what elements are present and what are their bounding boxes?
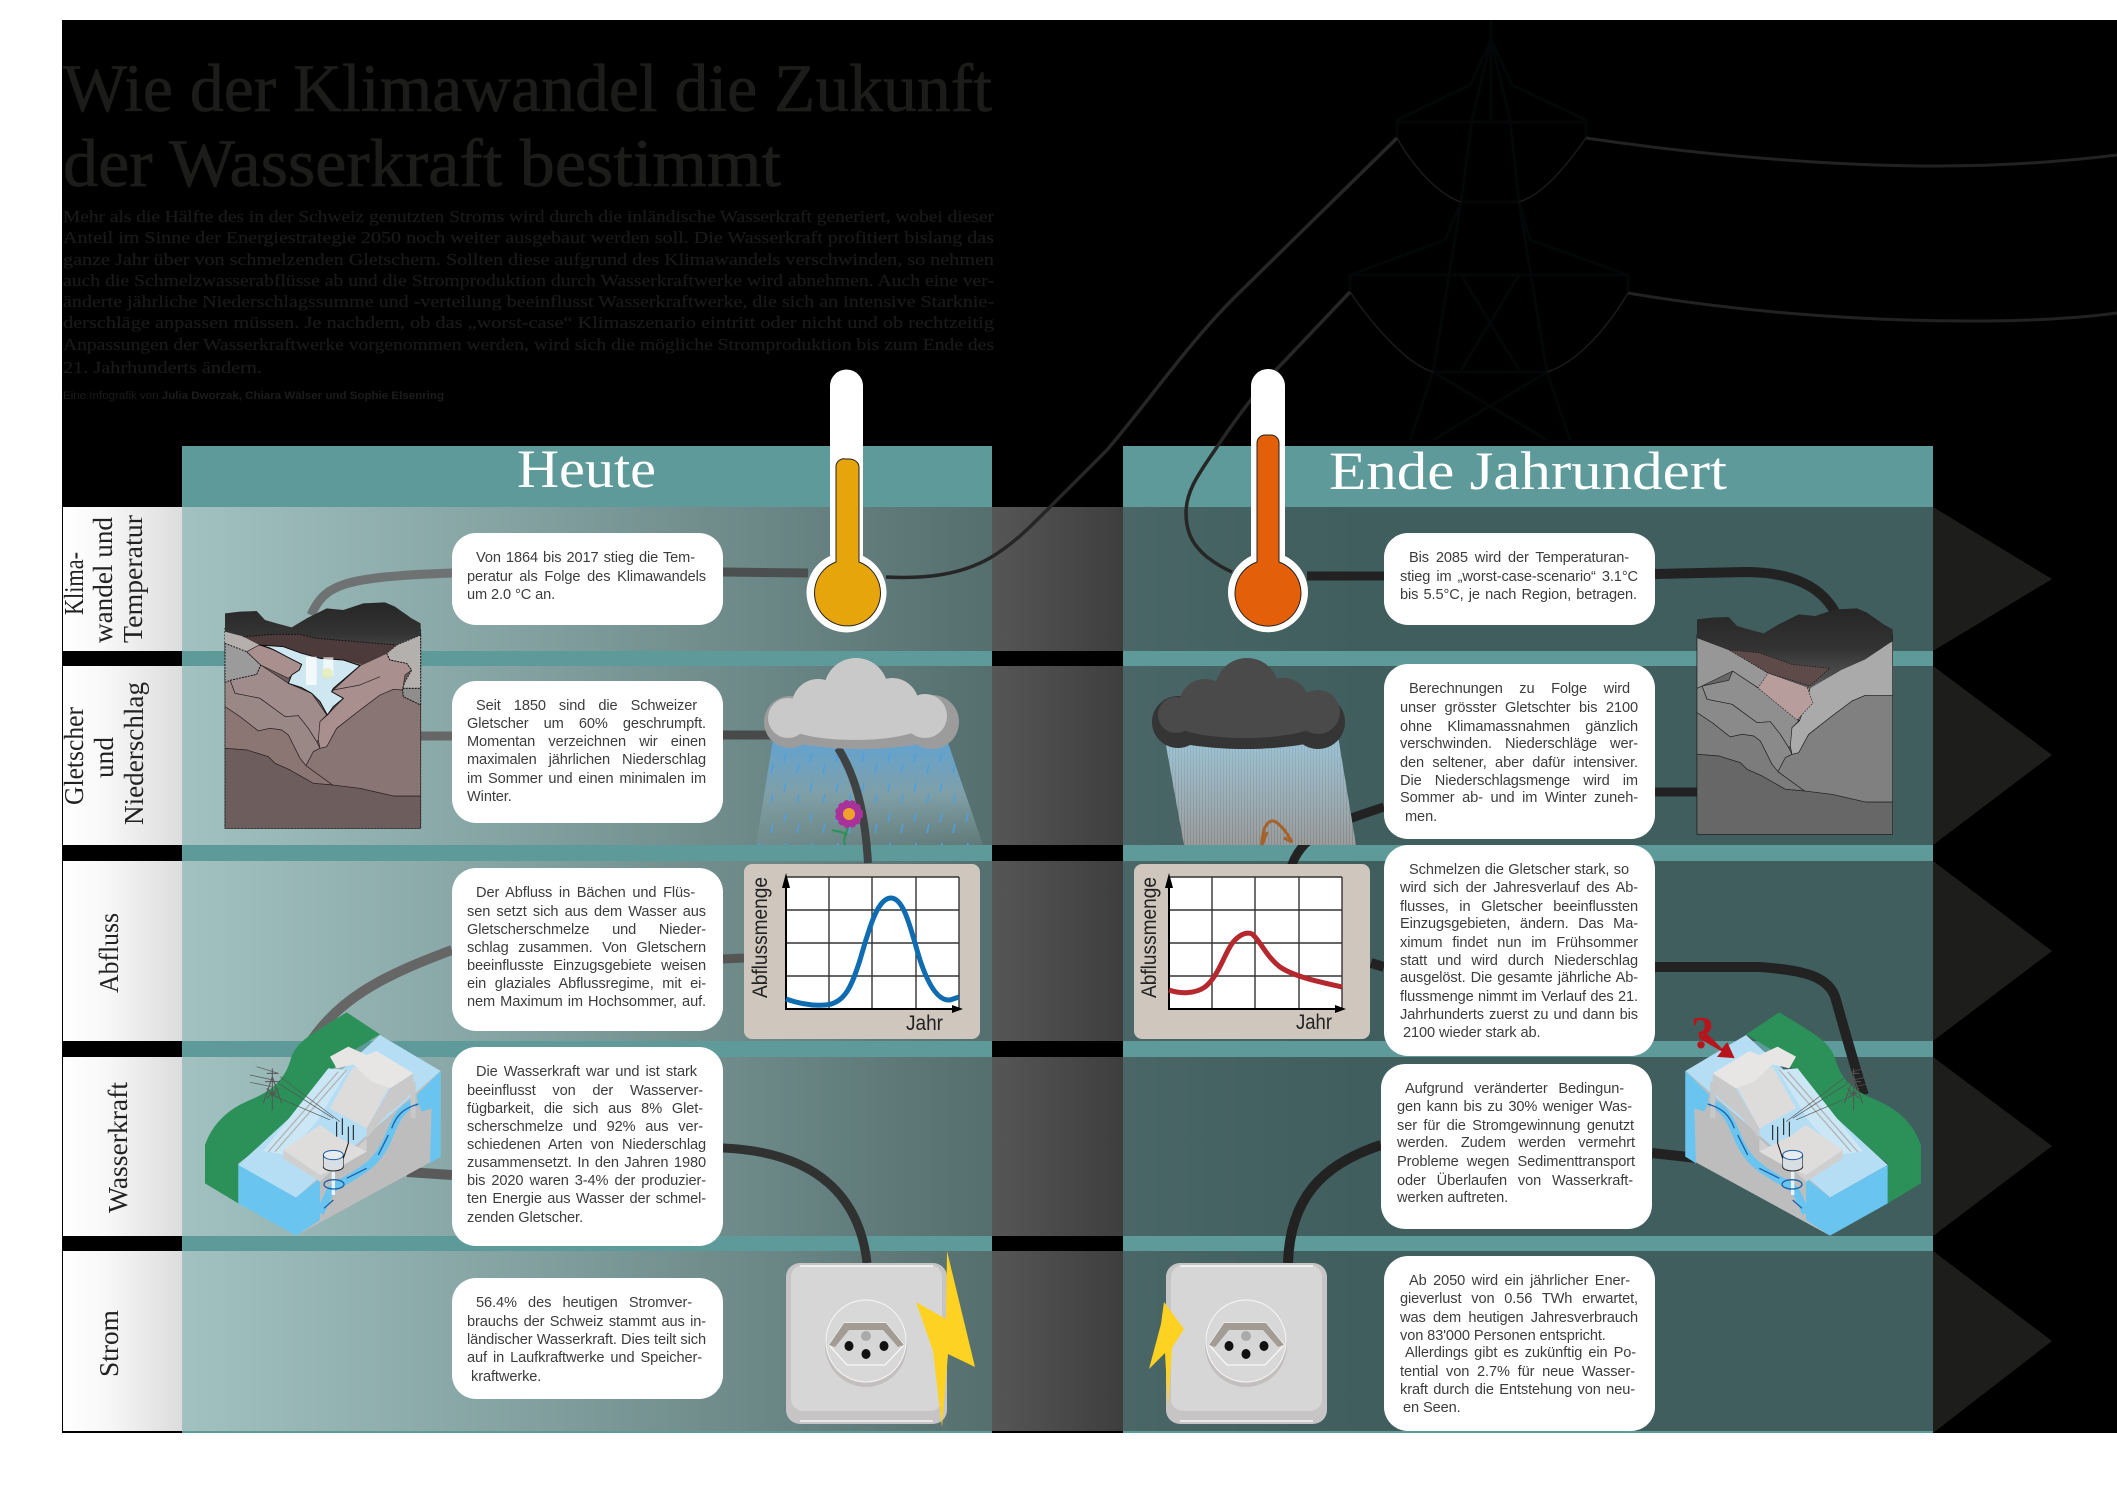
panel: row labels: [59, 507, 182, 1431]
text box: Abfluss future: [1384, 845, 1655, 1056]
text box: Wasserkraft future: werken auftreten.: [1397, 1190, 1508, 1206]
text box: Wasserkraft today: scherschmelze und 92% aus ver-: [467, 1119, 703, 1135]
panel: row labels: Niederschlag: [119, 682, 149, 825]
text box: Abfluss today: sen setzt sich aus dem Wasser aus: [467, 904, 706, 920]
text box: Abfluss future: Jahrhunderts zuerst zu und dann bis: [1400, 1007, 1638, 1023]
text box: Abfluss today: Gletscherschmelze und Nieder-: [467, 922, 706, 938]
panel: row labels: Klima-: [59, 552, 89, 615]
text box: Wasserkraft today: ten Energie aus Wasser der schmel-: [467, 1191, 706, 1207]
icon: lightning bolt today: [916, 1251, 975, 1427]
text box: Strom future: Ab 2050 wird ein jährlicher Ener-: [1409, 1273, 1630, 1289]
icon: hydro power plant future: [1685, 1012, 1921, 1236]
chart: runoff future: [1134, 864, 1370, 1039]
chart: runoff today: [744, 864, 980, 1039]
chart: runoff future: Jahr: [1296, 1011, 1332, 1034]
text box: Strom today: 56.4% des heutigen Stromver-: [476, 1295, 692, 1311]
panel: row labels: Abfluss: [94, 913, 124, 993]
text box: Gletscher future: ohne Klimamassnahmen gänzlich: [1400, 719, 1638, 735]
text box: Abfluss future: Schmelzen die Gletscher stark, so: [1409, 862, 1629, 878]
text box: Klimawandel today: [452, 533, 723, 625]
icon: red question mark and arrow: [1691, 1007, 1733, 1058]
text box: Wasserkraft today: Die Wasserkraft war und ist stark: [476, 1064, 697, 1080]
text box: Abfluss future: statt und wird durch Niederschlag: [1400, 953, 1638, 969]
text box: Abfluss today: schlag zusammen. Von Gletschern: [467, 940, 706, 956]
text box: Wasserkraft today: beeinflusst von der Wasserver-: [467, 1083, 703, 1099]
text box: Gletscher future: Die Niederschlagsmenge wird im: [1400, 773, 1638, 789]
text box: Gletscher future: unser grösster Gletschter bis 2100: [1400, 700, 1638, 716]
thermometer: today: [806, 370, 886, 632]
icon: hydro power plant today: [205, 1012, 441, 1236]
text box: Wasserkraft future: oder Überlaufen von Wasserkraft-: [1397, 1173, 1633, 1189]
text box: Abfluss today: nem Maximum im Hochsommer, auf.: [467, 994, 706, 1010]
text box: Strom today: auf in Laufkraftwerke und Speicher-: [467, 1350, 702, 1366]
text box: Wasserkraft future: [1381, 1064, 1652, 1229]
text box: Gletscher today: Seit 1850 sind die Schweizer: [476, 698, 697, 714]
text box: Wasserkraft today: schiedenen Arten von Niederschlag: [467, 1137, 706, 1153]
text box: Abfluss today: [452, 868, 723, 1031]
text box: Abfluss today: Der Abfluss in Bächen und Flüs-: [476, 885, 695, 901]
text box: Strom future: Allerdings gibt es zukünftig ein Po-: [1405, 1345, 1636, 1361]
text box: Klimawandel future: [1384, 533, 1655, 625]
text box: Strom today: [452, 1278, 723, 1399]
text box: Klimawandel today: um 2.0 °C an.: [467, 587, 555, 603]
text box: Strom today: brauchs der Schweiz stammt aus in-: [467, 1314, 706, 1330]
intro text: änderte jährliche Niederschlagssumme und -verteilung beeinflusst Wasserkraftwerke, die sich an intensive Starknie-: [63, 292, 994, 311]
text box: Strom today: kraftwerke.: [471, 1369, 541, 1385]
panel: row labels: Strom: [94, 1310, 124, 1377]
icon: socket future: [1166, 1263, 1327, 1424]
intro text: Mehr als die Hälfte des in der Schweiz genutzten Stroms wird durch die inländische Wasserkraft generiert, wobei dieser: [63, 207, 994, 226]
text box: Gletscher today: Momentan verzeichnen wir einen: [467, 734, 706, 750]
text box: Gletscher today: im Sommer und einen minimalen im: [467, 771, 706, 787]
icon: storm cloud with wilted flower, future: [1152, 658, 1356, 845]
title: [63, 50, 992, 201]
cable: thermometer to pylon, future: [1186, 292, 1350, 572]
intro text: auch die Schmelzwasserabflüsse ab und die Stromproduktion durch Wasserkraftwerke wird abnehmen. Auch eine ver-: [63, 271, 994, 290]
title: Wie der Klimawandel die Zukunft: [63, 50, 992, 126]
text box: Wasserkraft future: werden. Zudem werden vermehrt: [1397, 1135, 1635, 1151]
text box: Klimawandel future: stieg im „worst-case-scenario“ 3.1°C: [1400, 569, 1638, 585]
chart: runoff today: Abflussmenge: [749, 877, 772, 998]
text box: Wasserkraft future: Probleme wegen Sedimenttransport: [1397, 1154, 1635, 1170]
icon: red question mark and arrow: ?: [1691, 1007, 1714, 1058]
chart: runoff today: Jahr: [906, 1012, 943, 1035]
text box: Wasserkraft future: gen kann bis zu 30% weniger Was-: [1397, 1099, 1632, 1115]
panel: row labels: und: [89, 736, 119, 778]
cables: left panel: [300, 572, 867, 1263]
text box: Abfluss future: 2100 wieder stark ab.: [1403, 1025, 1540, 1041]
text box: Abfluss future: ausgelöst. Die gesamte jährliche Ab-: [1400, 970, 1638, 986]
text box: Strom future: von 83'000 Personen entspricht.: [1400, 1328, 1606, 1344]
text box: Wasserkraft today: fügbarkeit, die sich aus 8% Glet-: [467, 1101, 703, 1117]
text box: Abfluss future: flussmenge nimmt im Verlauf des 21.: [1400, 989, 1638, 1005]
thermometer: end of century: [1228, 369, 1308, 632]
text box: Strom future: gieverlust von 0.56 TWh erwartet,: [1400, 1291, 1638, 1307]
panel: row labels: Temperatur: [118, 515, 148, 643]
text box: Strom today: ländischer Wasserkraft. Dies teilt sich: [467, 1332, 706, 1348]
intro text: Anteil im Sinne der Energiestrategie 2050 noch weiter ausgebaut werden soll. Die Wasserkraft profitiert bislang das: [63, 228, 994, 247]
text box: Wasserkraft today: [452, 1047, 723, 1246]
text box: Wasserkraft today: zenden Gletscher.: [467, 1210, 583, 1226]
intro text: derschläge anpassen müssen. Je nachdem, ob das „worst-case“ Klimaszenario eintritt oder nicht und ob rechtzeitig: [63, 313, 995, 332]
text box: Gletscher today: [452, 681, 723, 823]
intro text: [63, 207, 995, 377]
text box: Gletscher today: Winter.: [467, 789, 512, 805]
arrows: row pointers: [1933, 507, 2052, 1433]
cable: thermometer to pylon, today: [886, 138, 1397, 577]
text box: Abfluss future: wird sich der Jahresverlauf des Ab-: [1400, 880, 1638, 896]
icon: lightning bolt future: [1149, 1302, 1184, 1407]
cables: right panel: [1288, 572, 1864, 1263]
text box: Abfluss future: ximum findet nun im Frühsommer: [1400, 935, 1638, 951]
icon: rain cloud with flower today: [756, 658, 983, 863]
text box: Strom future: [1384, 1256, 1655, 1431]
panel: row labels: Wasserkraft: [103, 1081, 133, 1213]
heading: Ende Jahrundert: Ende Jahrundert: [1329, 441, 1727, 501]
icon: mountain without glacier, future: [1697, 608, 1893, 834]
chart: runoff future: Abflussmenge: [1138, 877, 1161, 998]
intro text: 21. Jahrhunderts ändern.: [63, 358, 262, 377]
text box: Wasserkraft today: bis 2020 waren 3-4% der produzier-: [467, 1173, 706, 1189]
text box: Klimawandel today: peratur als Folge des Klimawandels: [467, 569, 706, 585]
text box: Klimawandel today: Von 1864 bis 2017 stieg die Tem-: [476, 550, 695, 566]
panel: middle connector bands: [992, 507, 1123, 1431]
text box: Strom future: en Seen.: [1403, 1400, 1461, 1416]
text box: Klimawandel future: Bis 2085 wird der Temperaturan-: [1409, 550, 1629, 566]
text box: Strom future: was dem heutigen Jahresverbrauch: [1400, 1310, 1638, 1326]
power pylon and wires: [1350, 20, 2117, 440]
panel: Heute background: [182, 446, 992, 1433]
intro text: ganze Jahr über von schmelzenden Gletschern. Sollten diese aufgrund des Klimawandels verschwinden, so nehmen: [63, 250, 995, 269]
panel: Ende Jahrundert background: [1123, 446, 1933, 1433]
text box: Wasserkraft today: zusammensetzt. In den Jahren 1980: [467, 1155, 706, 1171]
icon: socket today: [786, 1263, 947, 1424]
text box: Abfluss future: Einzugsgebieten, ändern. Das Ma-: [1400, 916, 1638, 932]
icon: mountain with glacier today: [225, 602, 421, 828]
text box: Gletscher future: [1384, 664, 1655, 839]
text box: Gletscher future: Sommer ab- und im Winter zuneh-: [1400, 790, 1638, 806]
intro text: Anpassungen der Wasserkraftwerke vorgenommen werden, wird sich die mögliche Stromproduktion bis zum Ende des: [63, 335, 994, 354]
panel: row labels: wandel und: [88, 516, 118, 643]
panel: row labels: Gletscher: [59, 707, 89, 805]
text box: Abfluss future: flusses, in Gletscher beeinflussten: [1400, 899, 1638, 915]
text box: Abfluss today: beeinflusste Einzugsgebiete weisen: [467, 958, 706, 974]
text box: Klimawandel future: bis 5.5°C, je nach Region, betragen.: [1400, 587, 1637, 603]
text box: Gletscher future: verschwinden. Niederschläge wer-: [1400, 736, 1638, 752]
title: der Wasserkraft bestimmt: [63, 125, 781, 201]
text box: Gletscher today: Gletscher um 60% geschrumpft.: [467, 716, 706, 732]
heading: Heute: Heute: [517, 439, 656, 499]
text box: Strom future: kraft durch die Entstehung von neu-: [1400, 1382, 1635, 1398]
text box: Abfluss today: ein glaziales Abflussregime, mit ei-: [467, 976, 706, 992]
credit line: Eine Infografik von Julia Dworzak, Chiara Wälser und Sophie Elsenring: [63, 390, 444, 402]
text box: Strom future: tential von 2.7% für neue Wasser-: [1400, 1364, 1635, 1380]
text box: Wasserkraft future: Aufgrund veränderter Bedingun-: [1405, 1081, 1624, 1097]
text box: Gletscher future: Berechnungen zu Folge wird: [1409, 681, 1630, 697]
text box: Gletscher future: men.: [1405, 809, 1437, 825]
text box: Gletscher today: maximalen jährlichen Niederschlag: [467, 752, 706, 768]
text box: Wasserkraft future: ser für die Stromgewinnung genutzt: [1397, 1118, 1634, 1134]
text box: Gletscher future: den seltener, aber dafür intensiver.: [1400, 755, 1638, 771]
